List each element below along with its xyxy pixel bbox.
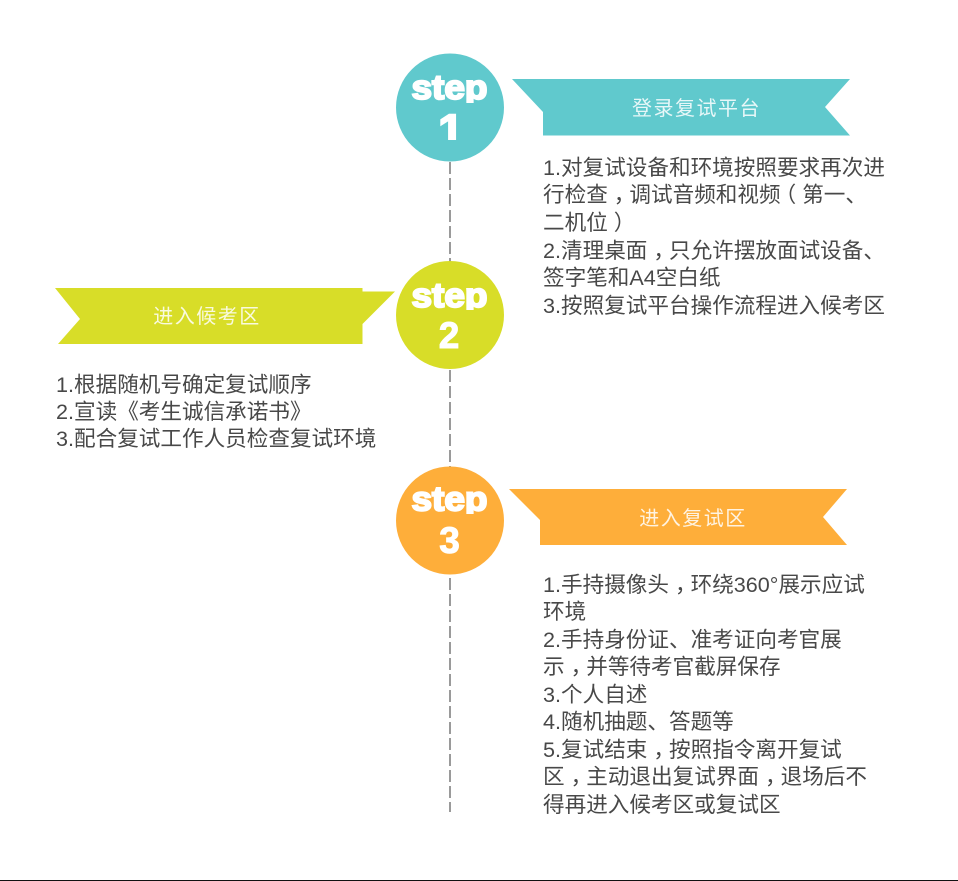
step 3 text block: 4.随机抽题、答题等 bbox=[543, 709, 734, 734]
step 1 badge: step bbox=[412, 69, 488, 107]
step 2 badge: 2 bbox=[439, 315, 459, 356]
step 1 badge: 1 bbox=[438, 104, 464, 157]
step 2 text block: 1.根据随机号确定复试顺序 bbox=[56, 372, 312, 397]
bottom border line bbox=[0, 880, 958, 881]
step 1 text block: 行检查 ，调试音频和视频（ 第一、 bbox=[543, 182, 867, 207]
step 1 text block: 3.按照复试平台操作流程进入候考区 bbox=[543, 293, 885, 318]
step 3 badge: step bbox=[412, 480, 488, 518]
step 2 banner: 进入候考区 bbox=[153, 305, 261, 328]
step 3 text block: 3.个人自述 bbox=[543, 682, 647, 707]
step 2 text block: 2.宣读《考生诚信承诺书》 bbox=[56, 399, 312, 424]
step 2 badge bbox=[396, 261, 504, 369]
step 3 banner bbox=[509, 489, 847, 545]
step 3 badge bbox=[396, 466, 504, 574]
step 3 text block: 区 ，主动退出复试界面 ，退场后不 bbox=[543, 764, 867, 789]
timeline dashed line bbox=[449, 162, 451, 812]
step 1 text block: 签字笔和A4空白纸 bbox=[543, 265, 721, 290]
step 2 text block bbox=[56, 372, 376, 451]
step 1 banner: 登录复试平台 bbox=[632, 97, 761, 120]
step 1 badge bbox=[396, 54, 504, 162]
step 3 text block: 1.手持摄像头 ，环绕360°展示应试 bbox=[543, 572, 865, 597]
step 3 banner: 进入复试区 bbox=[639, 507, 747, 530]
step 1 text block: 1.对复试设备和环境按照要求再次进 bbox=[543, 155, 885, 180]
step 1 banner bbox=[512, 79, 850, 136]
step 3 text block: 得再进入候考区或复试区 bbox=[543, 792, 781, 817]
step 2 banner bbox=[55, 288, 395, 344]
step 3 text block: 2.手持身份证、准考证向考官展 bbox=[543, 627, 842, 652]
step 1 text block: 2.清理桌面 ，只允许摆放面试设备、 bbox=[543, 238, 885, 263]
step 2 badge: step bbox=[412, 277, 488, 315]
step 3 text block: 示 ，并等待考官截屏保存 bbox=[543, 654, 781, 679]
step 3 badge: 3 bbox=[439, 520, 460, 561]
step 3 text block: 环境 bbox=[543, 599, 586, 624]
step 1 text block bbox=[543, 155, 885, 318]
step 3 text block: 5.复试结束 ，按照指令离开复试 bbox=[543, 737, 842, 762]
step 2 text block: 3.配合复试工作人员检查复试环境 bbox=[56, 426, 376, 451]
step 3 text block bbox=[543, 572, 867, 817]
step 1 text block: 二机位 ） bbox=[543, 210, 635, 235]
